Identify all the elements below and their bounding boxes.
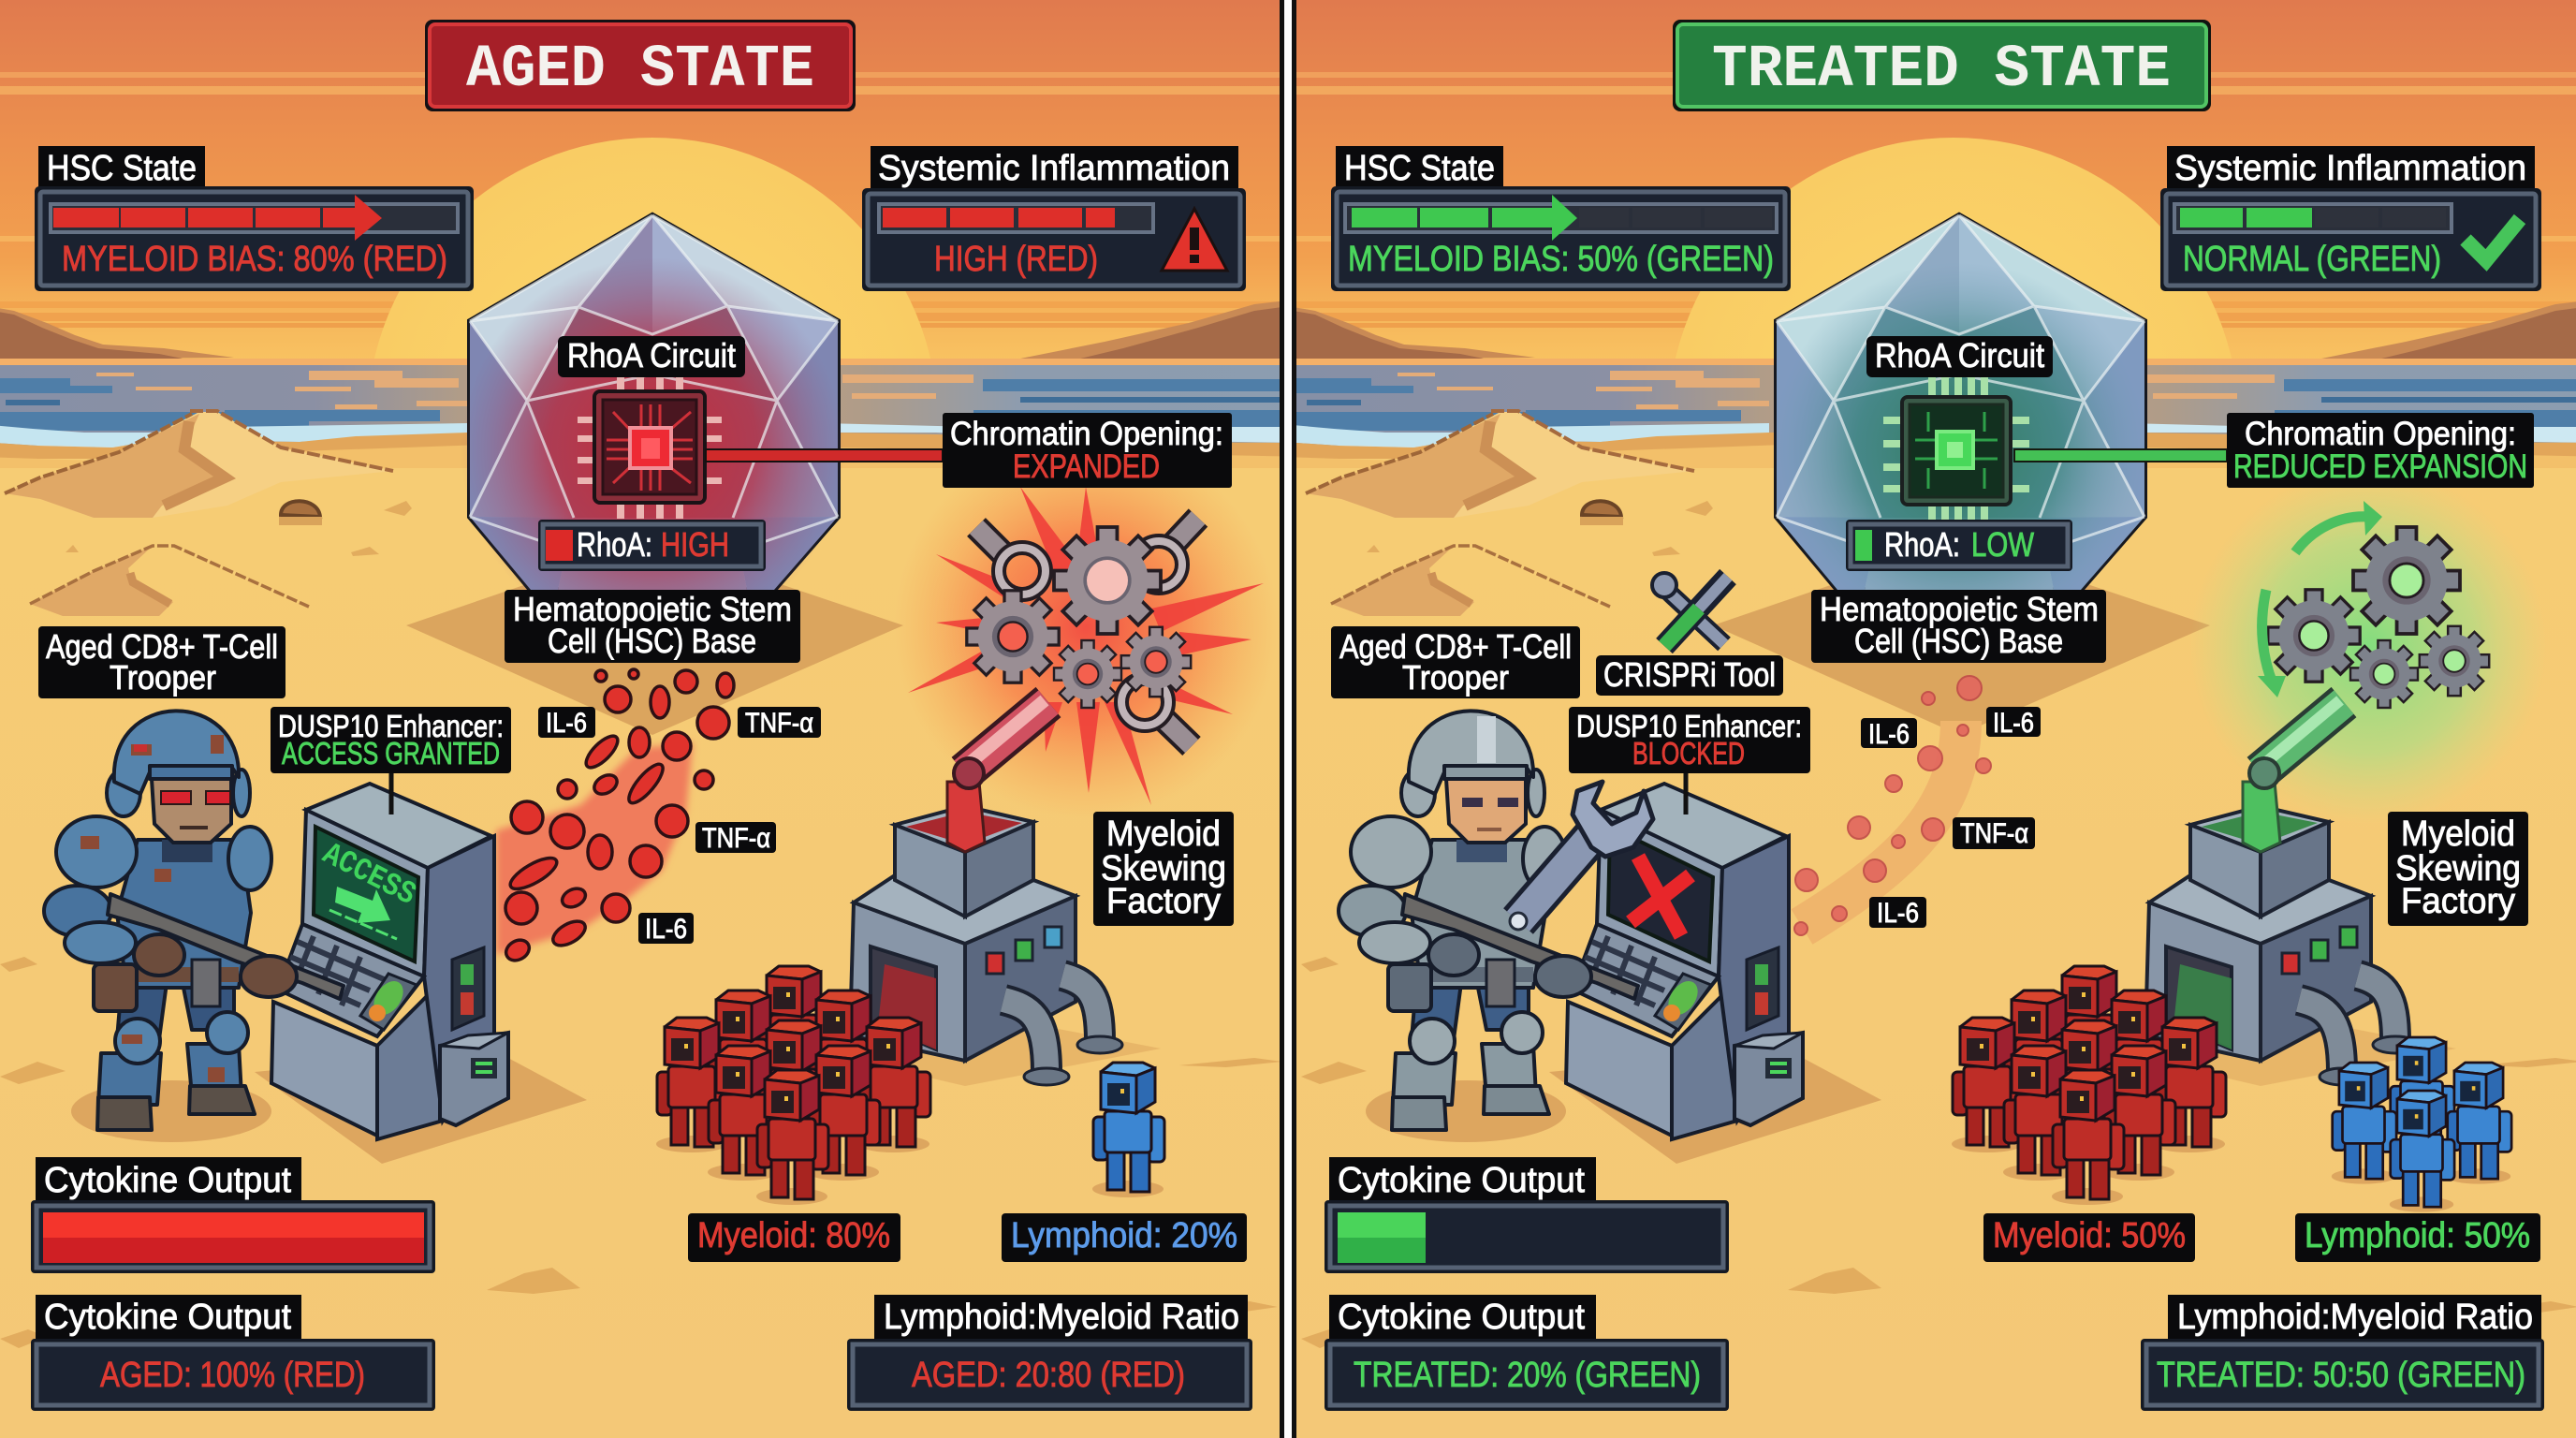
- treated trooper label: Aged CD8+ T-Cell: [1339, 627, 1572, 666]
- RhoA low readout: [1846, 520, 2072, 571]
- treated cytokine labels: [1861, 707, 2041, 929]
- aged exploding gears: [894, 435, 1278, 819]
- treated cytokine stream: [1794, 676, 1991, 935]
- panel: aged systemic inflammation: HIGH (RED): [934, 240, 1098, 279]
- treated DUSP10 label: BLOCKED: [1632, 736, 1745, 770]
- aged cytokine labels: IL-6: [645, 914, 687, 945]
- RhoA high readout: RhoA:: [577, 525, 652, 564]
- icon: check mark: [2466, 219, 2520, 260]
- HSC base label: [1811, 590, 2106, 663]
- TREATED STATE title: TREATED STATE: [1712, 37, 2171, 104]
- aged cytokine output value: Cytokine Output: [44, 1298, 291, 1337]
- treated gears with green glow: [2190, 468, 2546, 824]
- RhoA high readout: HIGH: [661, 525, 729, 564]
- icon: warning triangle: [1162, 209, 1227, 271]
- aged cytokine output value: AGED: 100% (RED): [100, 1356, 365, 1395]
- aged chromatin opening label: [943, 413, 1232, 488]
- wrench over treated terminal: [1510, 782, 1653, 930]
- aged DUSP10 label: DUSP10 Enhancer:: [278, 709, 504, 743]
- treated factory label: Skewing: [2395, 849, 2521, 888]
- treated crystal HSC: [1713, 215, 2227, 735]
- RhoA circuit label: RhoA Circuit: [567, 336, 736, 374]
- panel: aged systemic inflammation: Systemic Inflammation: [878, 149, 1230, 188]
- treated factory label: Myeloid: [2401, 814, 2515, 854]
- treated lymphoid robot group: [2332, 1037, 2511, 1212]
- aged trooper label: Trooper: [110, 658, 216, 697]
- AGED STATE title: [425, 20, 856, 111]
- RhoA high readout: [538, 520, 766, 571]
- treated myeloid robot army: [1952, 966, 2226, 1205]
- TREATED STATE title: [1673, 20, 2211, 111]
- treated lymphoid myeloid ratio: [2141, 1295, 2544, 1411]
- HSC base label: Cell (HSC) Base: [1854, 622, 2063, 660]
- panel: treated HSC state: [1331, 146, 1791, 291]
- aged factory label: Factory: [1106, 882, 1221, 921]
- panel: treated state scene: [1282, 0, 2576, 1438]
- RhoA low readout: RhoA:: [1884, 525, 1960, 564]
- aged cytokine labels: IL-6: [546, 708, 587, 739]
- treated trooper label: [1331, 626, 1580, 698]
- RhoA circuit chip: [578, 377, 722, 519]
- aged myeloid robot army: [656, 966, 930, 1205]
- aged trooper label: Aged CD8+ T-Cell: [46, 627, 278, 666]
- treated factory with green arm: [2100, 700, 2456, 1086]
- aged lymphoid robot: [1092, 1063, 1164, 1197]
- aged cytokine labels: TNF-α: [702, 823, 770, 854]
- chip connector line: [2014, 449, 2227, 462]
- chip connector line: [706, 449, 943, 462]
- panel: aged systemic inflammation: [862, 146, 1246, 291]
- aged lymphoid myeloid ratio: Lymphoid:Myeloid Ratio: [884, 1298, 1239, 1337]
- CRISPRi tool label: CRISPRi Tool: [1603, 655, 1776, 694]
- aged DUSP10 label: ACCESS GRANTED: [282, 736, 500, 770]
- icon: CRISPRi tool: [1652, 573, 1728, 646]
- treated cytokine labels: TNF-α: [1960, 818, 2028, 849]
- aged DUSP10 terminal: ACCESS: [316, 837, 421, 914]
- aged cytokine labels: [538, 707, 821, 945]
- aged factory label: Myeloid: [1106, 814, 1221, 854]
- treated cytokine output bar: [1325, 1157, 1729, 1273]
- aged factory label: Skewing: [1101, 849, 1226, 888]
- treated chromatin opening label: Chromatin Opening:: [2245, 416, 2516, 452]
- treated DUSP10 label: DUSP10 Enhancer:: [1576, 709, 1802, 743]
- panel: treated HSC state: MYELOID BIAS: 50% (GREEN): [1348, 240, 1774, 279]
- aged cytokine labels: TNF-α: [745, 708, 813, 739]
- treated cytokine labels: IL-6: [1993, 708, 2034, 739]
- treated DUSP10 terminal: [1549, 773, 1881, 1164]
- aged factory label: [1093, 812, 1234, 926]
- aged cytokine stream: [496, 669, 734, 964]
- panel: aged HSC state: MYELOID BIAS: 80% (RED): [62, 240, 447, 279]
- treated lymphoid myeloid ratio: TREATED: 50:50 (GREEN): [2157, 1356, 2525, 1395]
- treated cytokine output value: TREATED: 20% (GREEN): [1354, 1356, 1701, 1395]
- treated DUSP10 label: [1569, 707, 1810, 773]
- aged crystal HSC: [406, 215, 943, 735]
- treated trooper gun: [1402, 894, 1638, 1006]
- panel: aged state scene: [0, 0, 1310, 1438]
- panel: aged HSC state: [35, 146, 474, 291]
- aged cytokine output value: [31, 1295, 435, 1411]
- treated lymphoid myeloid ratio: Lymphoid:Myeloid Ratio: [2177, 1298, 2533, 1337]
- RhoA circuit label: RhoA Circuit: [1875, 336, 2044, 374]
- aged lymphoid percent: Lymphoid: 20%: [1011, 1216, 1237, 1255]
- treated soldier trooper: [1339, 711, 1566, 1142]
- panel: aged HSC state: HSC State: [47, 149, 197, 188]
- aged DUSP10 label: [271, 707, 511, 773]
- panel: treated systemic inflammation: [2160, 146, 2541, 291]
- treated cytokine output value: Cytokine Output: [1338, 1298, 1585, 1337]
- aged chromatin opening label: EXPANDED: [1013, 448, 1160, 485]
- treated factory label: Factory: [2401, 882, 2515, 921]
- aged soldier trooper: [44, 711, 271, 1142]
- treated factory label: [2388, 812, 2528, 926]
- treated cytokine labels: IL-6: [1868, 719, 1910, 750]
- RhoA low readout: LOW: [1971, 525, 2034, 564]
- icon: rotation arrows: [2258, 501, 2382, 697]
- aged trooper label: [38, 626, 285, 698]
- aged trooper gun: [108, 894, 344, 1006]
- aged lymphoid myeloid ratio: AGED: 20:80 (RED): [912, 1356, 1185, 1395]
- panel: treated systemic inflammation: Systemic Inflammation: [2174, 149, 2526, 188]
- treated cytokine output value: [1325, 1295, 1729, 1411]
- panel: treated HSC state: HSC State: [1344, 149, 1495, 188]
- aged cytokine output bar: [31, 1157, 435, 1273]
- aged myeloid percent: Myeloid: 80%: [697, 1216, 890, 1255]
- treated lymphoid percent: Lymphoid: 50%: [2305, 1216, 2530, 1255]
- RhoA circuit chip: [1883, 377, 2029, 520]
- HSC base label: Hematopoietic Stem: [1820, 590, 2099, 628]
- treated cytokine labels: IL-6: [1877, 898, 1919, 929]
- treated trooper label: Trooper: [1402, 658, 1509, 697]
- HSC base label: Hematopoietic Stem: [513, 590, 792, 628]
- panel: treated systemic inflammation: NORMAL (GREEN): [2183, 240, 2441, 279]
- aged factory with red arm: [805, 700, 1161, 1086]
- aged lymphoid myeloid ratio: [847, 1295, 1252, 1411]
- treated chromatin opening label: [2227, 413, 2534, 488]
- treated cytokine output bar: Cytokine Output: [1338, 1161, 1585, 1200]
- AGED STATE title: AGED STATE: [466, 37, 814, 104]
- aged chromatin opening label: Chromatin Opening:: [950, 416, 1223, 452]
- HSC base label: Cell (HSC) Base: [548, 622, 756, 660]
- aged DUSP10 terminal: [255, 773, 587, 1164]
- treated myeloid percent: Myeloid: 50%: [1993, 1216, 2186, 1255]
- aged cytokine output bar: Cytokine Output: [44, 1161, 291, 1200]
- panel divider: [1280, 0, 1296, 1438]
- HSC base label: [505, 590, 800, 663]
